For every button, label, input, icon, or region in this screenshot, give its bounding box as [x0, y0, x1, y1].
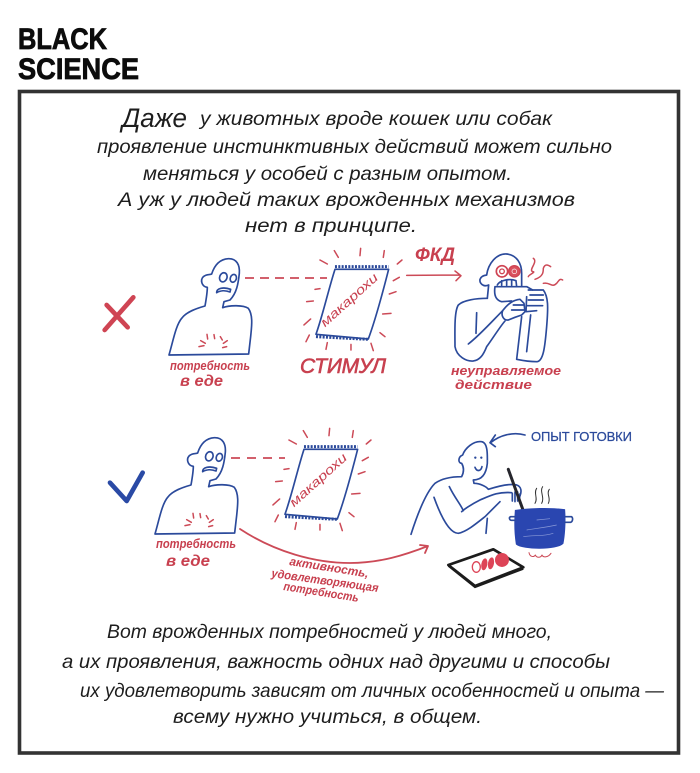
- macaroni package, second: [273, 428, 371, 531]
- closing text: Вот врожденных потребностей у людей много,: [107, 622, 552, 643]
- closing text: всему нужно учиться, в общем.: [173, 707, 482, 728]
- icon: pot with spoon: [508, 469, 573, 557]
- label: need for food, second: [156, 536, 236, 570]
- label: activity satisfying the need: потребность: [283, 579, 360, 605]
- icon: cutting board with sliced food: [448, 549, 523, 587]
- label: activity satisfying the need: удовлетворяющая: [270, 566, 379, 595]
- label: uncontrolled action: неуправляемое: [451, 363, 561, 378]
- arrow: FAP: [407, 245, 461, 281]
- logo: BLACK: [18, 23, 107, 56]
- callout: cooking experience: [490, 429, 632, 447]
- closing text: их удовлетворить зависят от личных особенностей и опыта —: [80, 681, 665, 702]
- intro text: [97, 103, 612, 237]
- dashed line to stimulus: [245, 277, 327, 279]
- person: need for food, wrong scheme: [169, 259, 252, 355]
- person: need for food, right scheme: [155, 438, 238, 534]
- macaroni package: stimulus: [304, 248, 402, 351]
- person: uncontrolled eating: [455, 254, 563, 362]
- label: need for food: в еде: [180, 373, 223, 390]
- label: uncontrolled action: действие: [455, 377, 532, 392]
- callout: cooking experience: ОПЫТ ГОТОВКИ: [531, 429, 632, 444]
- label: stimulus: СТИМУЛ: [300, 355, 387, 378]
- curved arrow: activity: [240, 529, 428, 563]
- label: need for food: потребность: [170, 358, 250, 373]
- label: activity satisfying the need: активность,: [289, 554, 370, 580]
- closing text: [62, 622, 665, 728]
- dashed line, stops short of stimulus: [231, 457, 285, 459]
- intro text: проявление инстинктивных действий может сильно: [97, 137, 612, 158]
- intro text: меняться у особей с разным опытом.: [143, 164, 512, 185]
- label: uncontrolled action: [451, 363, 561, 392]
- arrow: FAP: ФКД: [415, 245, 455, 266]
- intro text: у животных вроде кошек или собак: [198, 109, 553, 130]
- macaroni package, second: макарохи: [287, 451, 350, 510]
- label: need for food, second: в еде: [166, 553, 210, 570]
- label: activity satisfying the need: [270, 554, 379, 605]
- label: need for food, second: потребность: [156, 536, 236, 551]
- icon: red cross: [105, 297, 133, 330]
- icon: blue check mark: [110, 473, 143, 501]
- closing text: а их проявления, важность одних над другими и способы: [62, 652, 610, 673]
- label: need for food: [170, 358, 250, 390]
- intro text: нет в принципе.: [245, 216, 417, 237]
- intro text: А уж у людей таких врожденных механизмов: [117, 190, 575, 211]
- macaroni package: stimulus: макарохи: [318, 271, 381, 330]
- logo: SCIENCE: [18, 53, 139, 86]
- person: cooking: [411, 442, 521, 534]
- logo: [18, 23, 139, 86]
- intro text: Даже: [119, 103, 187, 133]
